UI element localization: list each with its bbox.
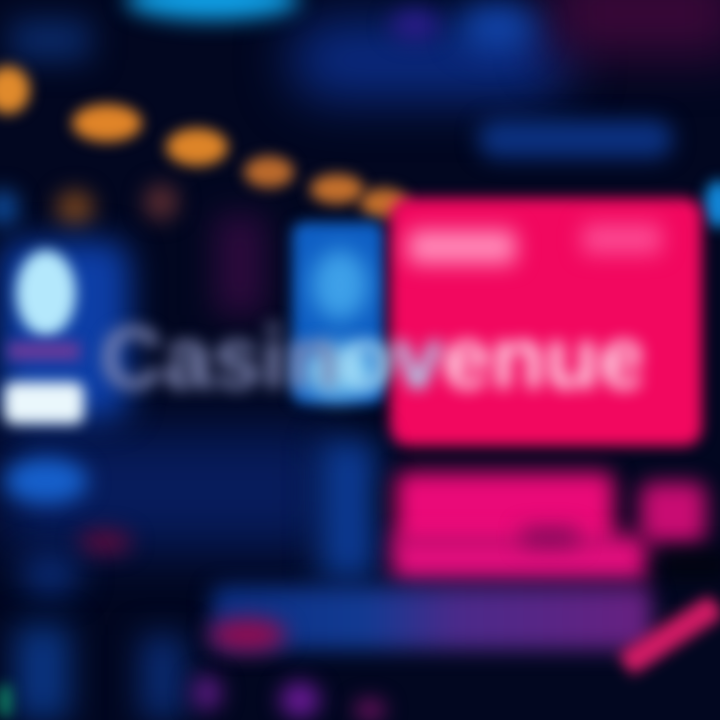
lamp 5: [310, 174, 364, 204]
light: top blue spot: [460, 5, 535, 50]
sign text: upper left label: [408, 230, 516, 264]
sign: upper right blue bar: [478, 120, 673, 158]
sign text: upper right label: [582, 224, 662, 254]
background: mid blue haze: [0, 430, 330, 550]
lamp 1: [0, 66, 30, 114]
bottom pink spot: [355, 700, 385, 720]
central lower cyan glow: [300, 345, 376, 397]
pink reflection right: [640, 482, 706, 544]
lamp 3: [166, 128, 228, 166]
pink reflection lower: [392, 535, 647, 581]
lamp 6: [360, 188, 408, 218]
background: upper blue glow: [290, 20, 570, 100]
orange lamps row: [0, 56, 414, 235]
background: upper right maroon glow: [550, 0, 720, 55]
bottom left blue column: [15, 625, 70, 720]
background: top left blue glow: [10, 20, 90, 60]
bottom purple spot 2: [280, 682, 320, 718]
left bright white bar: [4, 382, 84, 424]
purple floor gradient: [212, 586, 652, 650]
left white-blue lamp: [16, 250, 76, 336]
pink diagonal stripe: [618, 594, 720, 676]
dark red column: [215, 215, 265, 315]
left pink stripe: [8, 342, 80, 360]
central light blue glow: [312, 250, 368, 320]
left edge blue spot: [0, 190, 18, 226]
lamp 4: [244, 156, 294, 188]
dark lower right: [660, 552, 720, 578]
bottom left green spot: [0, 686, 10, 716]
lower red lamp: [208, 618, 286, 652]
bottom blue column: [140, 635, 185, 720]
lamp 2: [72, 104, 142, 142]
right edge blue spot: [704, 180, 720, 228]
lamp 8 dim: [144, 184, 178, 220]
lower left blue glow: [4, 458, 88, 504]
lower dark round object: [360, 478, 408, 526]
lower left blue spot: [20, 555, 80, 595]
left blue panel: [0, 240, 130, 420]
lamp 7 dim: [56, 190, 94, 226]
lower left red spot: [78, 530, 132, 554]
central blue column: [320, 440, 376, 580]
panel: pink neon sign: [390, 198, 702, 446]
light: top violet spot: [390, 10, 440, 40]
light: top cyan lamp: [125, 0, 300, 20]
dark smudge in reflection: [522, 528, 578, 546]
pink reflection main: [396, 472, 614, 548]
central blue panel: [292, 222, 384, 404]
bottom purple spot 1: [192, 675, 222, 711]
